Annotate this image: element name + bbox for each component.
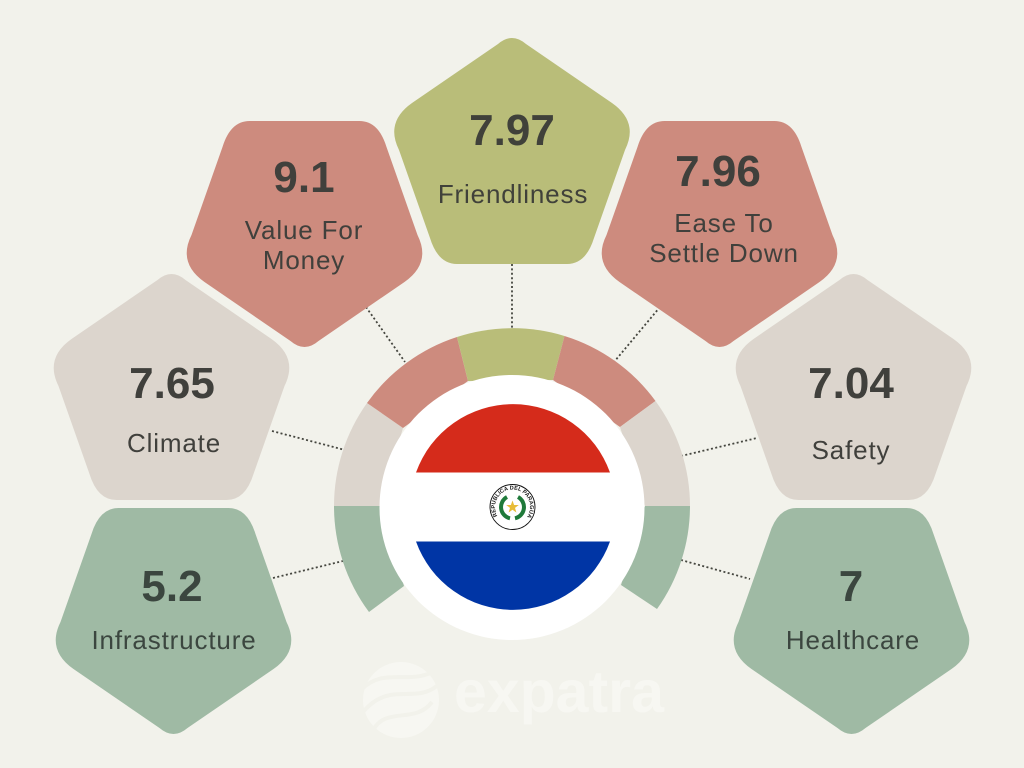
panel: climate: Climate: [127, 428, 221, 458]
panel: climate: 7.65: [129, 359, 215, 408]
panel: healthcare: Healthcare: [786, 625, 920, 655]
logo: expatra watermark: [361, 659, 665, 738]
icon: national seal: [490, 484, 536, 530]
logo: expatra watermark: expatra: [454, 659, 665, 725]
panel: infrastructure: [56, 508, 291, 734]
panel: safety: [736, 274, 971, 500]
panel: ease to settle down: Ease To: [674, 208, 774, 238]
panel: ease to settle down: Settle Down: [649, 238, 799, 268]
ring chart: [334, 328, 690, 612]
panel: friendliness: Friendliness: [438, 179, 588, 209]
panel: infrastructure: 5.2: [141, 562, 203, 611]
icon: national seal: REPUBLICA DEL PARAGUAY: [491, 486, 534, 518]
panel: friendliness: [394, 38, 630, 264]
panel: value for money: 9.1: [273, 153, 335, 202]
panel: friendliness: 7.97: [469, 106, 555, 155]
panel: healthcare: 7: [839, 562, 863, 611]
panel: ease to settle down: [602, 121, 837, 347]
flag of Paraguay: [380, 375, 644, 640]
panel: climate: [54, 274, 289, 500]
panel: ease to settle down: 7.96: [675, 147, 761, 196]
panel: healthcare: [734, 508, 969, 734]
panel: value for money: [187, 121, 422, 347]
panel: safety: Safety: [812, 435, 890, 465]
panel: value for money: Value For: [245, 215, 363, 245]
panel: infrastructure: Infrastructure: [91, 625, 257, 655]
panel: value for money: Money: [263, 245, 345, 275]
dotted connectors: [272, 264, 757, 579]
panel: safety: 7.04: [808, 359, 894, 408]
